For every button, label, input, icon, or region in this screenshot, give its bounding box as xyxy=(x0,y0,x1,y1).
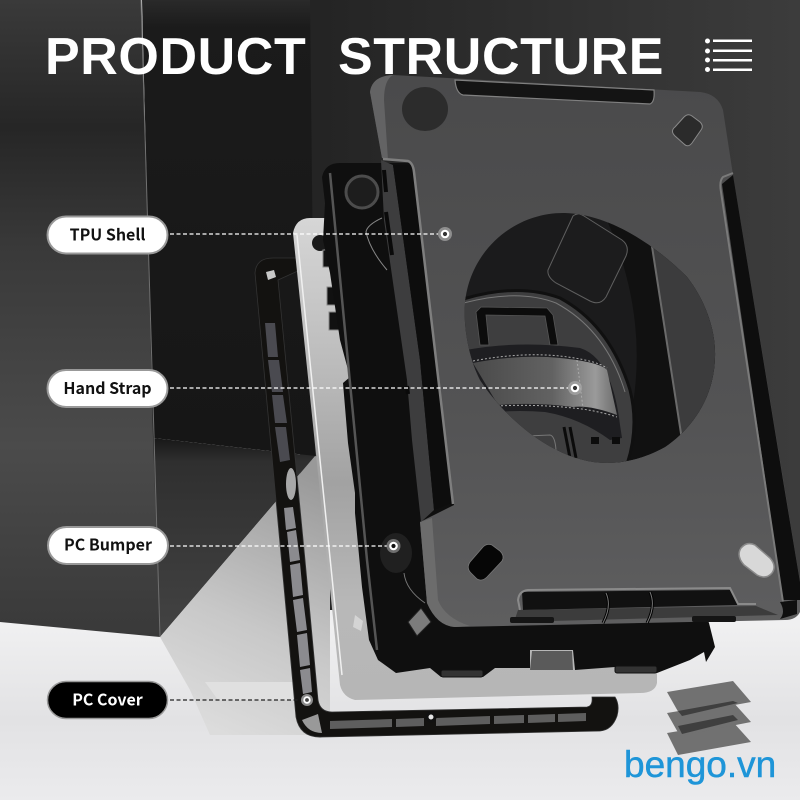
marker: TPU Shell xyxy=(438,227,452,241)
lower slot xyxy=(522,590,738,610)
label: TPU Shell xyxy=(48,216,168,254)
side stripe xyxy=(381,160,434,522)
PC bumper xyxy=(322,163,715,677)
label: PC Cover xyxy=(48,682,168,718)
logo icon: stacked sheets xyxy=(667,681,751,755)
rear camera square xyxy=(548,214,627,303)
icon: list menu xyxy=(705,38,752,72)
lower-right oval hole xyxy=(739,544,774,577)
callout leader lines xyxy=(170,234,568,700)
hand strap xyxy=(466,344,622,440)
PC cover frame xyxy=(255,258,618,737)
label: PC Cover: PC Cover xyxy=(72,686,143,710)
top right hole xyxy=(672,115,702,146)
title: PRODUCT xyxy=(45,28,306,86)
label: Hand Strap xyxy=(48,370,168,407)
central opening xyxy=(460,205,720,470)
marker: Hand Strap xyxy=(568,381,582,395)
tablet xyxy=(293,218,657,700)
title: STRUCTURE xyxy=(338,28,664,86)
label: PC Bumper xyxy=(48,527,168,564)
marker: PC Cover xyxy=(301,694,313,706)
lower-left pill hole xyxy=(468,544,503,580)
marker: PC Bumper xyxy=(386,539,400,553)
label: PC Bumper: PC Bumper xyxy=(64,532,152,556)
top slot xyxy=(455,80,654,104)
strap bracket xyxy=(476,307,558,345)
label: TPU Shell: TPU Shell xyxy=(70,222,145,246)
right black strip xyxy=(722,175,800,600)
camera hole xyxy=(402,87,448,131)
TPU shell xyxy=(370,75,800,627)
label: Hand Strap: Hand Strap xyxy=(63,375,152,399)
logo: bengo.vn: bengo.vn xyxy=(624,744,776,785)
